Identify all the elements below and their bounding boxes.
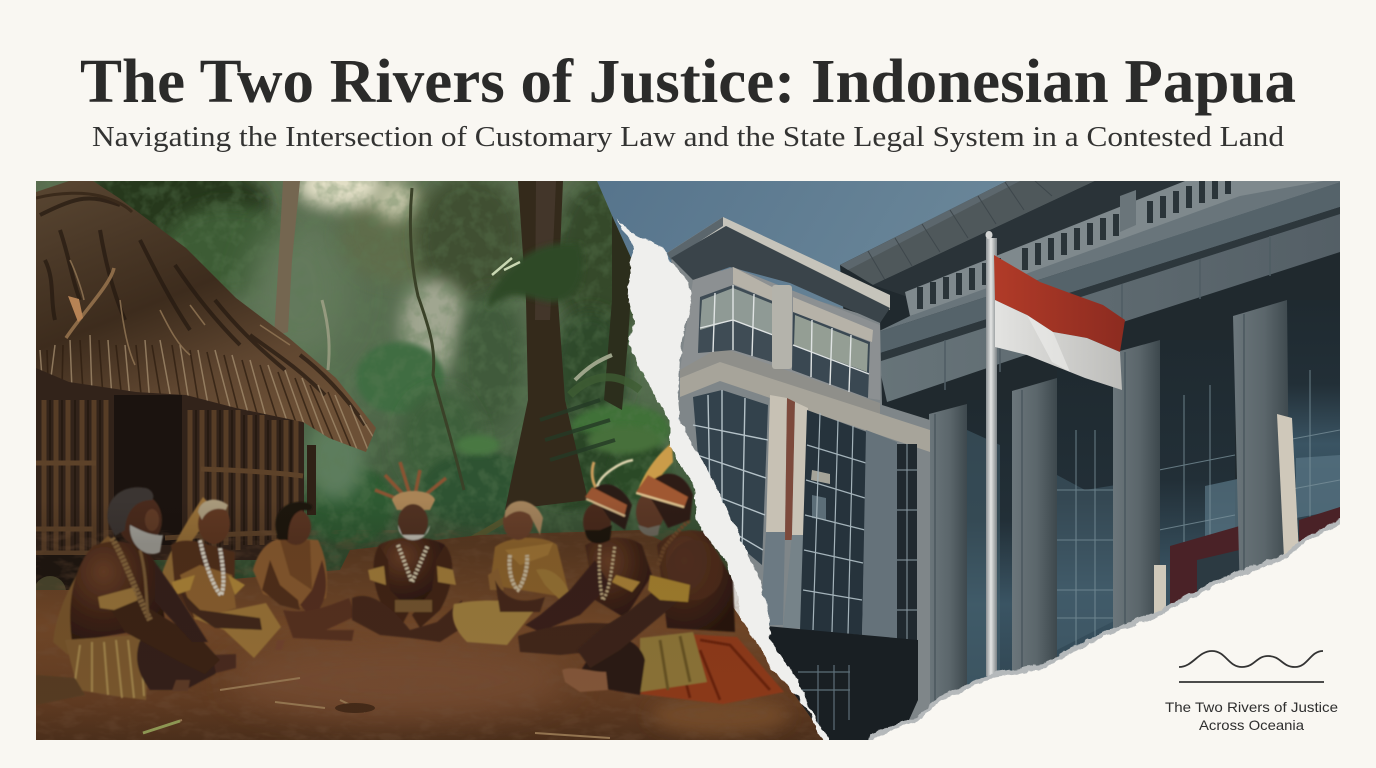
sky xyxy=(597,181,1006,420)
glass curtain walls xyxy=(967,370,1340,684)
elder woman in shawl xyxy=(253,502,356,641)
lower windows left xyxy=(693,390,768,565)
thatched roof xyxy=(36,181,376,452)
panel: customary law photo xyxy=(34,160,836,745)
bottom margin xyxy=(0,740,1376,768)
logo: two rivers mark xyxy=(1179,651,1324,682)
Indonesian flag xyxy=(994,255,1125,390)
dark plinth xyxy=(766,626,918,740)
right photo margin xyxy=(1340,500,1352,560)
panel: state legal system photo xyxy=(590,172,1340,740)
foreground man with red grass skirt xyxy=(562,443,784,704)
main building roof xyxy=(840,181,1190,296)
fern foliage xyxy=(456,243,660,460)
pale concrete pillars xyxy=(1154,414,1299,625)
forest background xyxy=(36,181,733,581)
round column xyxy=(772,285,792,369)
left office wing xyxy=(667,217,930,740)
subtitle: Navigating the Intersection of Customary Law and the State Legal System in a Contested Land xyxy=(92,121,1285,153)
hut walls xyxy=(34,365,316,608)
tall jungle trunks xyxy=(274,181,634,545)
red entrance panel xyxy=(1170,507,1340,604)
wing upper wall xyxy=(680,267,880,400)
louvred upper storey xyxy=(905,172,1340,316)
series caption: Across Oceania xyxy=(1199,717,1304,733)
torn lower edge shadow xyxy=(866,519,1350,750)
warm shade over the figures xyxy=(36,500,836,745)
courthouse main building mass xyxy=(840,181,1340,542)
straight river line xyxy=(1179,681,1324,683)
grey pier xyxy=(862,430,897,640)
torn paper strip between the two worlds xyxy=(616,219,829,742)
wavy river line xyxy=(1179,651,1323,667)
series caption xyxy=(1165,699,1338,733)
main building entablature xyxy=(875,178,1340,402)
ground xyxy=(36,530,836,745)
woman with white bead necklace xyxy=(160,497,285,658)
series caption: The Two Rivers of Justice xyxy=(1165,699,1338,715)
upper windows xyxy=(698,285,870,398)
narrow window xyxy=(897,444,917,649)
basement window grid xyxy=(798,665,850,730)
beige bands xyxy=(680,267,930,452)
flag pole xyxy=(986,231,997,676)
chief with feathered headdress xyxy=(352,462,462,642)
elder man with grey beard xyxy=(36,487,236,705)
lower windows centre xyxy=(800,410,867,635)
title: The Two Rivers of Justice: Indonesian Papua xyxy=(80,48,1296,116)
beige pillars xyxy=(760,395,808,628)
torn paper corner xyxy=(864,524,1350,752)
stone columns xyxy=(929,300,1290,740)
smiling woman in woven dress xyxy=(453,501,570,645)
wing roof xyxy=(667,217,890,323)
man with woven headband xyxy=(518,460,652,655)
